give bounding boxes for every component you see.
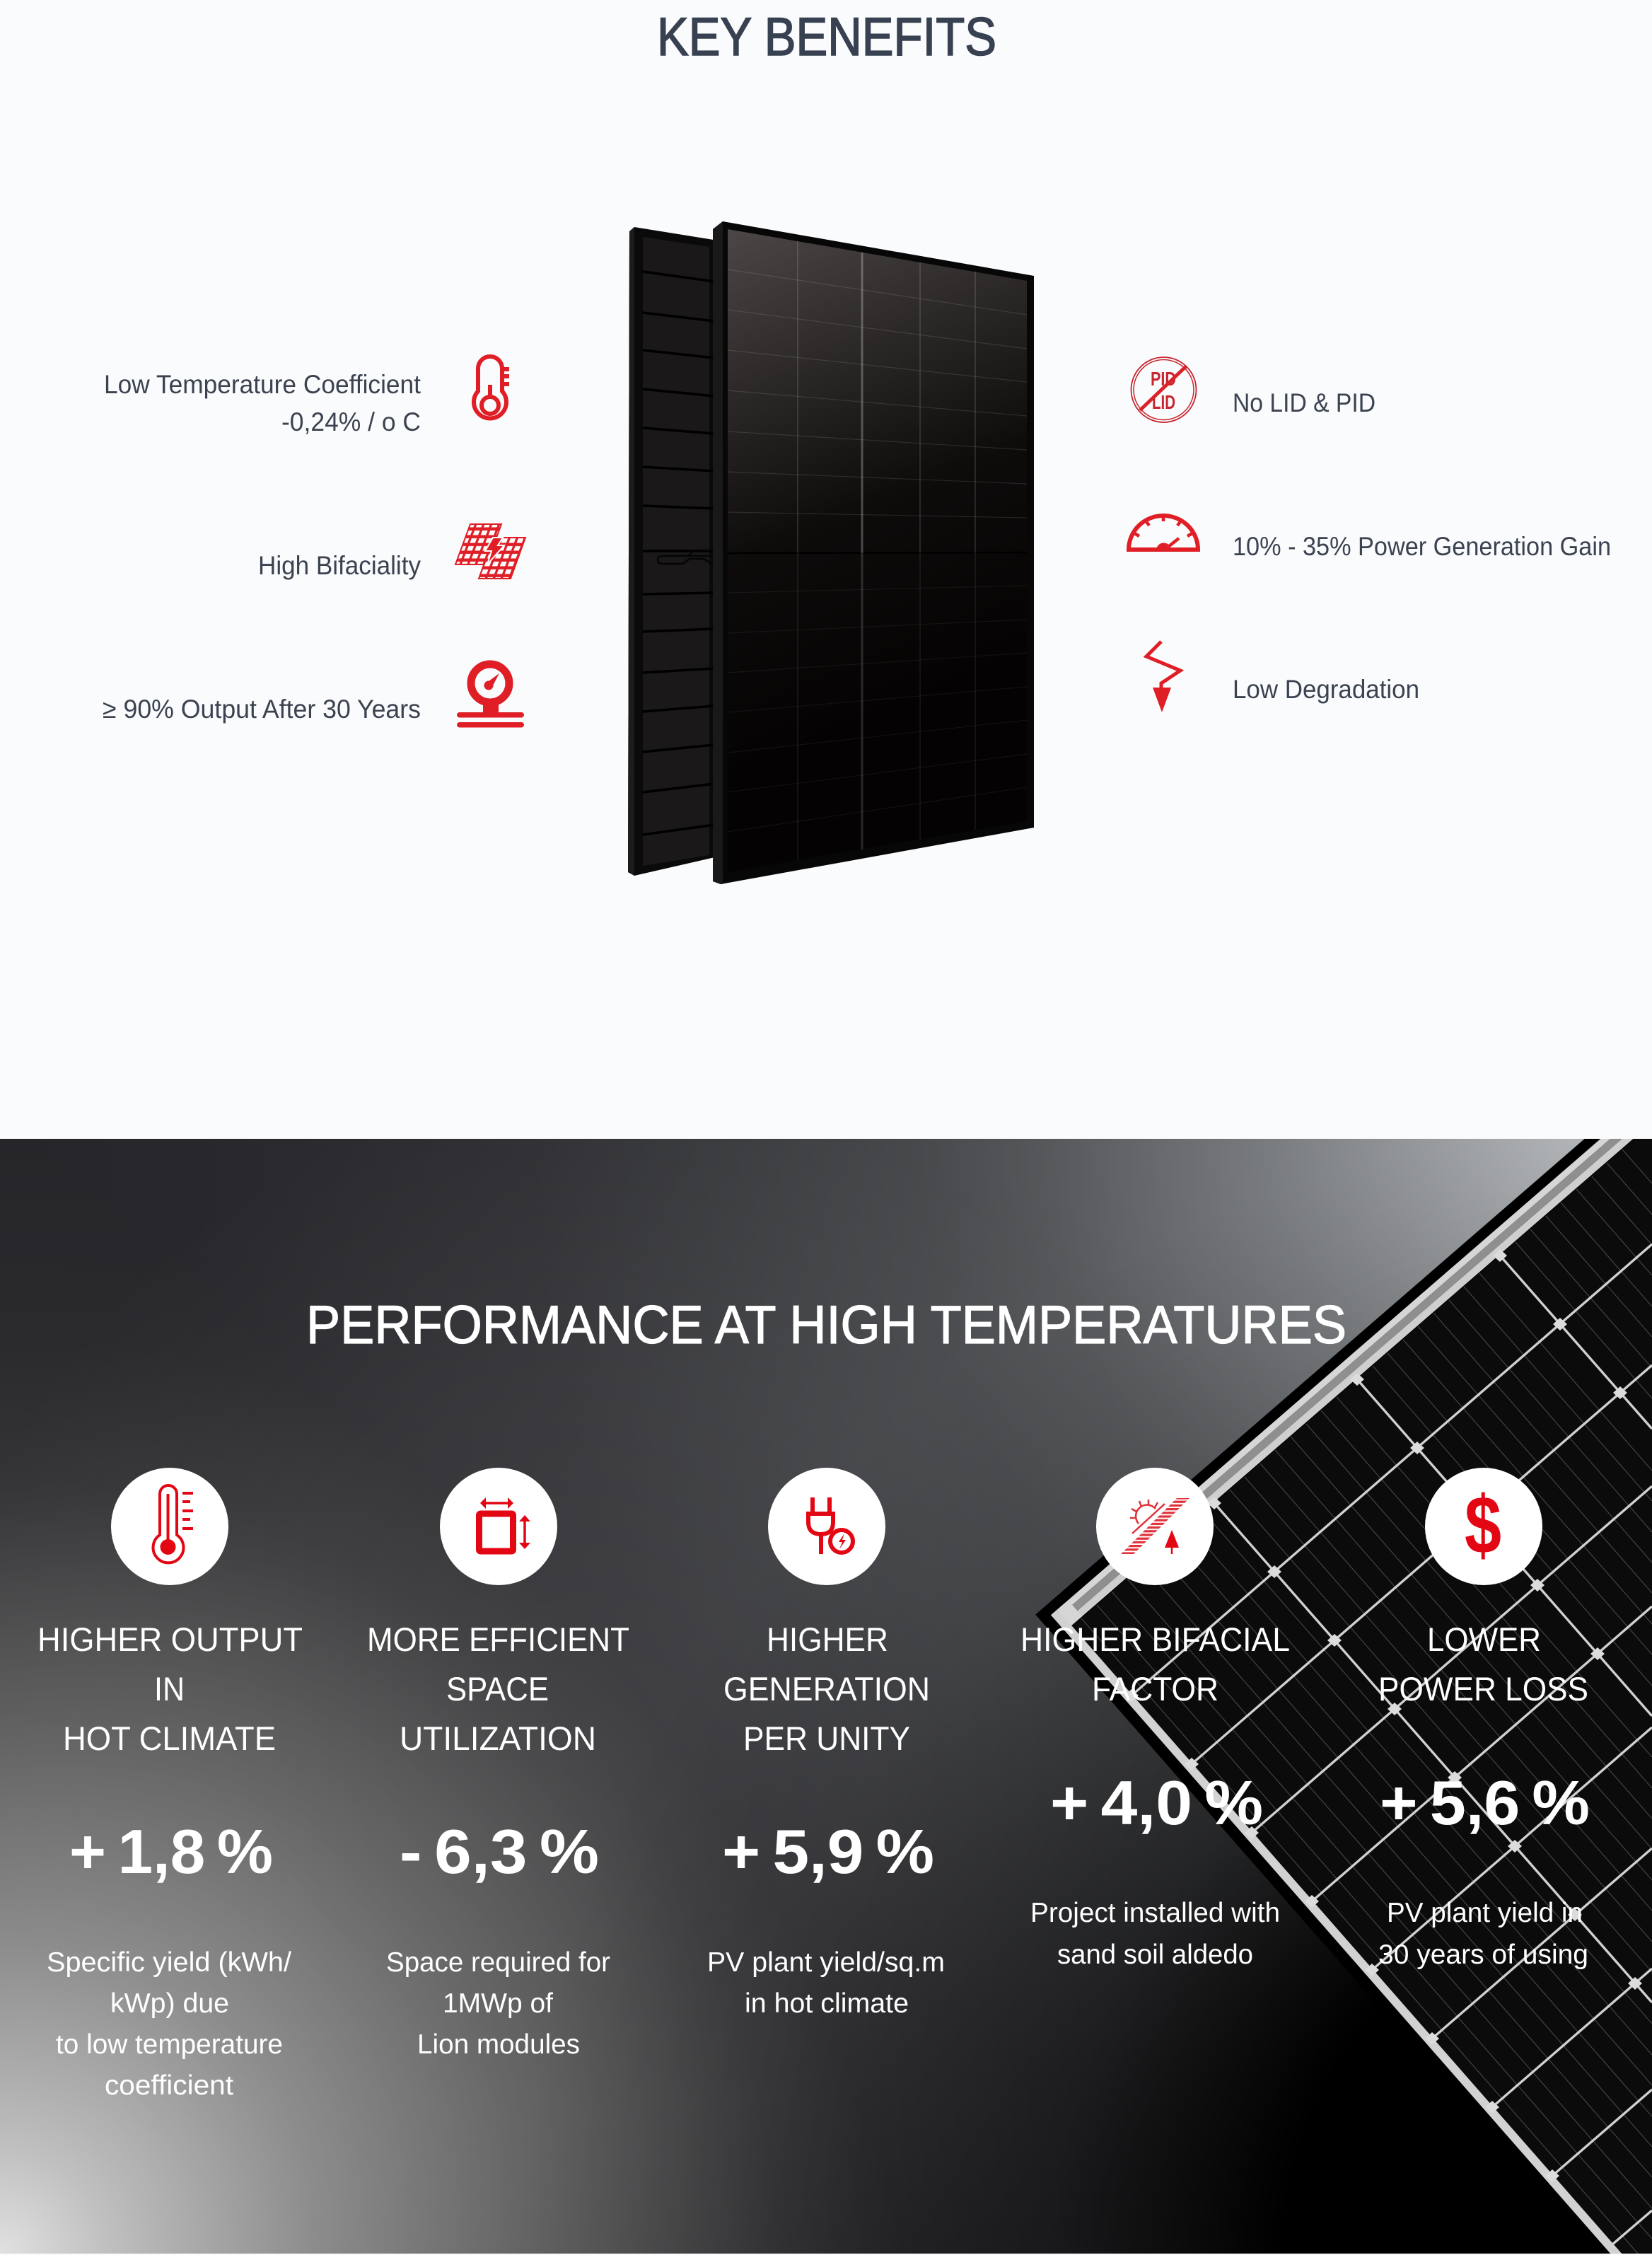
- heading: HIGHER OUTPUT: [37, 1621, 303, 1658]
- gradient background: [0, 1139, 1652, 2254]
- benefit: low temperature coefficient: [104, 356, 509, 436]
- icon: solar panels with bolt: [455, 524, 525, 579]
- heading: [723, 1621, 930, 1757]
- heading: GENERATION: [723, 1670, 930, 1708]
- icon: thermometer in circle: [111, 1468, 228, 1585]
- description: PV plant yield in: [1387, 1898, 1583, 1928]
- heading: IN: [154, 1670, 185, 1708]
- heading: [367, 1621, 629, 1757]
- icon: speedometer: [1129, 516, 1198, 550]
- heading: LOWER: [1427, 1621, 1541, 1658]
- description: [707, 1947, 945, 2019]
- heading: UTILIZATION: [400, 1720, 596, 1757]
- heading: HIGHER: [767, 1621, 888, 1658]
- column: lower power loss: [1378, 1468, 1590, 1970]
- heading: SPACE: [446, 1670, 549, 1708]
- icon: plug with energy circle: [768, 1468, 885, 1585]
- value: - 6,3 %: [400, 1816, 599, 1886]
- description: coefficient: [105, 2070, 233, 2101]
- heading: MORE EFFICIENT: [367, 1621, 629, 1658]
- label: 10% - 35% Power Generation Gain: [1233, 532, 1611, 561]
- column: higher bifacial factor: [1020, 1468, 1290, 1970]
- label: Low Temperature Coefficient: [104, 370, 421, 399]
- heading: POWER LOSS: [1378, 1670, 1588, 1708]
- benefit: output after 30 years: [103, 664, 524, 727]
- label: -0,24% / o C: [281, 407, 421, 436]
- benefit: high bifaciality: [258, 524, 525, 580]
- description: sand soil aldedo: [1057, 1940, 1253, 1970]
- heading: HOT CLIMATE: [63, 1720, 276, 1757]
- benefit: no LID and PID: [1132, 357, 1375, 422]
- benefit: low degradation: [1146, 642, 1419, 712]
- icon: zigzag down arrow: [1146, 642, 1180, 712]
- solar module close-up: [1035, 1139, 1652, 2254]
- description: 1MWp of: [443, 1988, 553, 2019]
- heading: [1378, 1621, 1588, 1708]
- icon: crossed PID LID: PID: [1151, 368, 1176, 390]
- column: more efficient space utilization: [367, 1468, 629, 2060]
- description: Lion modules: [417, 2029, 580, 2060]
- title: key benefits: KEY BENEFITS: [657, 7, 996, 67]
- icon: dollar sign: $: [1465, 1479, 1501, 1571]
- heading: [37, 1621, 303, 1757]
- benefit: power generation gain: [1129, 516, 1611, 561]
- description: [1030, 1898, 1280, 1970]
- value: + 5,9 %: [722, 1816, 934, 1886]
- value: + 1,8 %: [69, 1816, 273, 1886]
- section heading: PERFORMANCE AT HIGH TEMPERATURES: [306, 1295, 1346, 1355]
- heading: FACTOR: [1092, 1670, 1218, 1708]
- heading: PER UNITY: [743, 1720, 910, 1757]
- description: [386, 1947, 610, 2060]
- label: ≥ 90% Output After 30 Years: [103, 695, 421, 724]
- heading: HIGHER BIFACIAL: [1020, 1621, 1290, 1658]
- panel: performance at high temperatures: [0, 1139, 1652, 2254]
- connector cable: [658, 550, 713, 564]
- label: Low Degradation: [1233, 675, 1419, 704]
- value: + 4,0 %: [1050, 1768, 1263, 1838]
- back of module: [628, 227, 718, 876]
- description: PV plant yield/sq.m: [707, 1947, 945, 1978]
- icon: crossed PID LID: LID: [1152, 391, 1175, 413]
- heading: [1020, 1621, 1290, 1708]
- icon: box with dimension arrows: [440, 1468, 557, 1585]
- description: Space required for: [386, 1947, 610, 1978]
- description: Project installed with: [1030, 1898, 1280, 1928]
- product image: bifacial solar module back and front: [628, 221, 1034, 884]
- description: [1378, 1898, 1588, 1970]
- column: higher generation per unity: [707, 1468, 945, 2019]
- description: to low temperature: [56, 2029, 283, 2060]
- description: 30 years of using: [1378, 1940, 1588, 1970]
- label: [104, 370, 421, 436]
- description: [47, 1947, 291, 2101]
- value: + 5,6 %: [1380, 1768, 1590, 1838]
- description: Specific yield (kWh/: [47, 1947, 291, 1978]
- icon: crossed PID LID: [1132, 357, 1197, 422]
- icon: dollar sign: [1425, 1468, 1542, 1585]
- column: higher output: [37, 1468, 303, 2101]
- icon: sun, panel and arrow: [1096, 1468, 1214, 1585]
- icon: pressure gauge: [457, 664, 524, 727]
- description: kWp) due: [110, 1988, 229, 2019]
- front of module: [713, 221, 1034, 884]
- description: in hot climate: [745, 1988, 909, 2019]
- icon: thermometer: [474, 356, 509, 418]
- label: High Bifaciality: [258, 551, 421, 580]
- label: No LID & PID: [1233, 388, 1375, 417]
